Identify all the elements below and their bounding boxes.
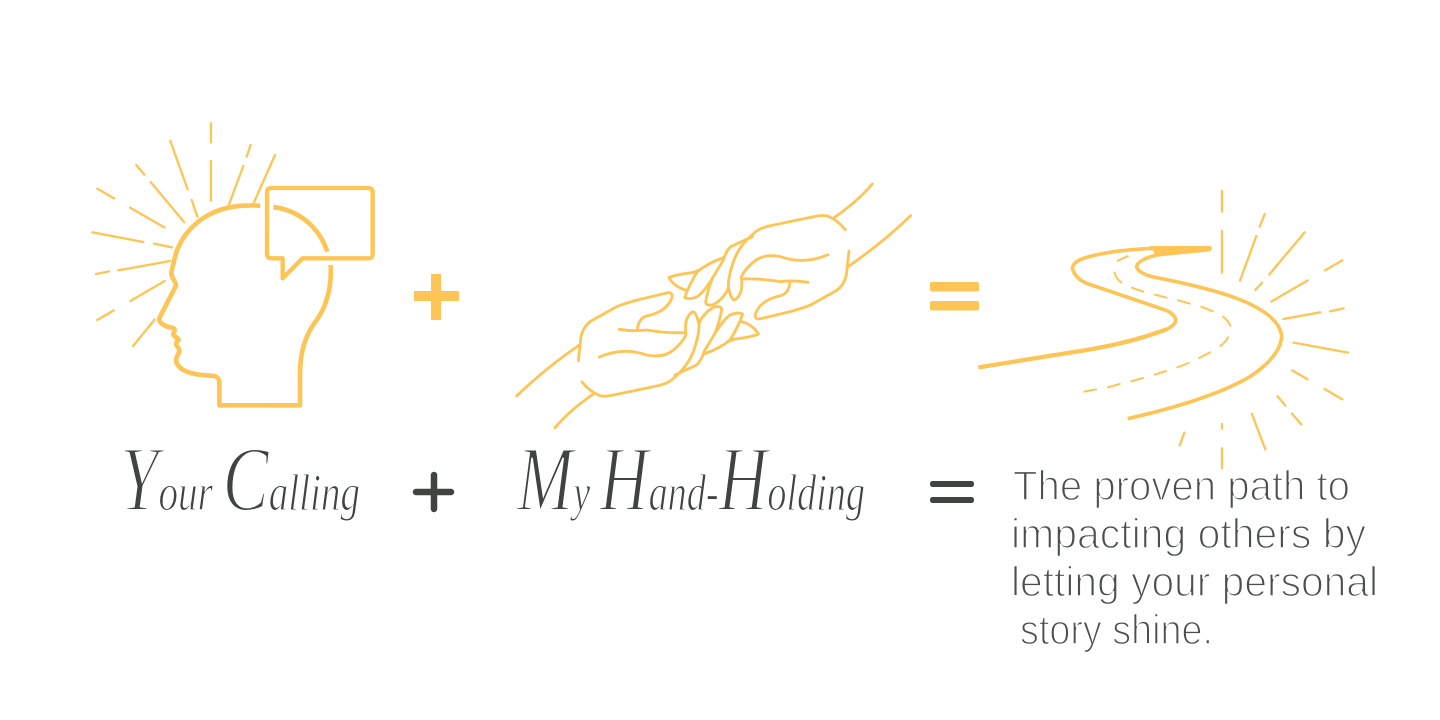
icon: winding road with sun rays <box>978 191 1348 468</box>
lower left hand <box>517 293 758 428</box>
icon: two hands holding <box>517 184 911 428</box>
label: My Hand-Holding: My Hand-Holding <box>516 428 865 530</box>
icon: head with speech bubble and rays <box>92 123 373 405</box>
result description text: The proven path to <box>1013 462 1350 509</box>
label: Your Calling: Your Calling <box>120 428 360 530</box>
result description text: story shine. <box>1020 606 1213 653</box>
speech bubble <box>267 188 373 278</box>
result description text: impacting others by <box>1011 510 1366 557</box>
head rays <box>92 123 275 346</box>
upper right hand <box>669 184 911 319</box>
dark equals sign <box>930 481 974 503</box>
head outline <box>159 205 331 405</box>
yellow plus sign <box>414 274 459 320</box>
sun rays <box>1180 191 1348 468</box>
result description text <box>1011 462 1378 653</box>
road centre dashes <box>1084 256 1230 392</box>
road edges <box>978 246 1282 419</box>
yellow equals sign <box>930 282 979 310</box>
result description text: letting your personal <box>1011 558 1378 605</box>
dark plus sign <box>416 475 451 509</box>
